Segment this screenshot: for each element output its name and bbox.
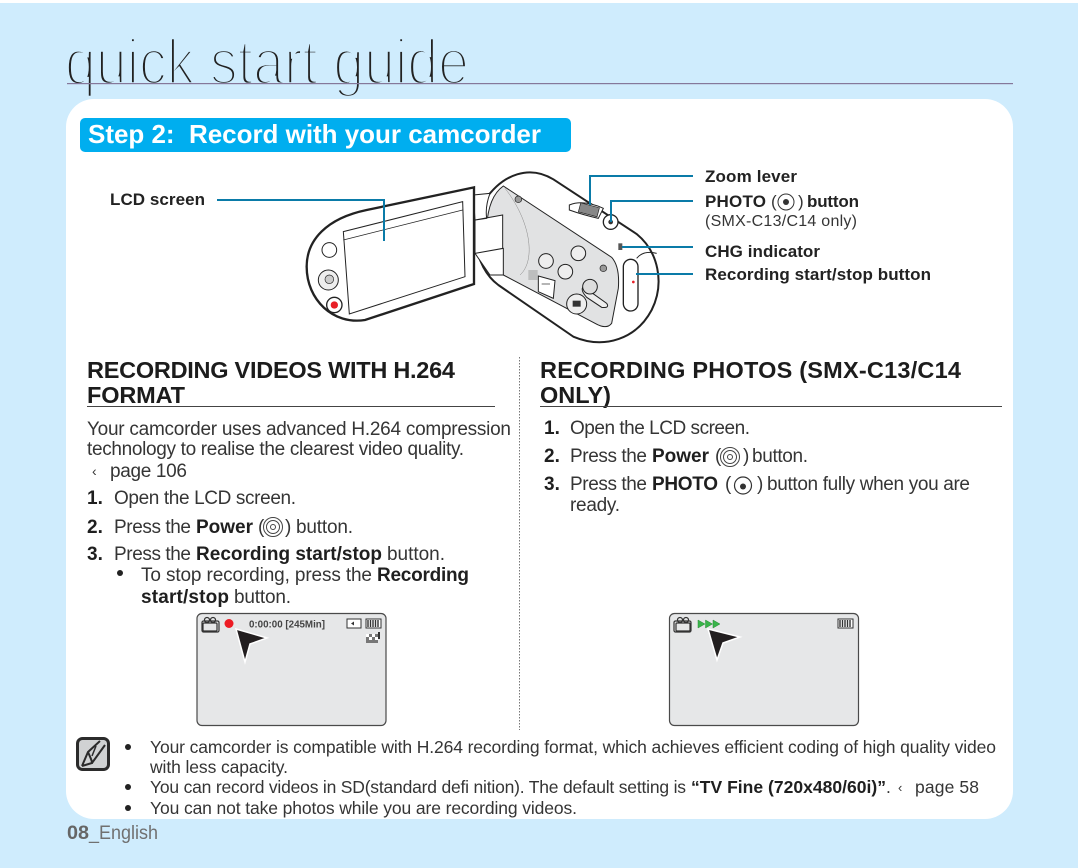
list: video steps: button. [296, 517, 353, 538]
list: video steps: ) [285, 517, 291, 538]
label: photo button: (SMX-C13/C14 only) [705, 213, 857, 230]
label: photo button [705, 192, 859, 230]
text: video intro: page 106 [110, 461, 187, 482]
icon: camera mode [674, 618, 691, 632]
camcorder body [475, 172, 659, 342]
notes list [125, 737, 996, 818]
title: quick start guide [65, 26, 469, 98]
heading: recording photos: ONLY) [540, 382, 611, 408]
list: photo steps: Power [652, 446, 710, 467]
callout lines [217, 176, 693, 274]
notes list: “TV Fine (720x480/60i)” [691, 777, 886, 797]
text: video intro: technology to realise the clearest video quality. [87, 439, 464, 460]
screen: photo mode [670, 614, 858, 726]
icon: power [264, 518, 282, 536]
label: LCD screen: LCD screen [110, 190, 205, 209]
heading: recording photos: RECORDING PHOTOS (SMX-C13/C14 [540, 357, 961, 383]
icon: camera mode [202, 618, 219, 632]
notes list: ‹ [898, 780, 902, 795]
screen: video recording: 0:00:00 [245Min] [249, 620, 325, 630]
notes list: with less capacity. [149, 757, 288, 777]
list: video steps: button. [387, 544, 445, 565]
list: video steps: Press the [114, 544, 191, 565]
list: photo steps: button fully when you are [767, 474, 970, 495]
heading: recording videos [87, 357, 495, 408]
list: photo steps: ) [743, 446, 749, 467]
heading: recording videos: FORMAT [87, 382, 186, 408]
list: video steps: 3. [87, 544, 103, 565]
list: video steps: start/stop [141, 587, 229, 608]
list: photo steps: 3. [544, 474, 560, 495]
notes list: page 58 [915, 777, 979, 797]
notes list: You can record videos in SD(standard defi nition). The default setting is [150, 777, 686, 797]
column divider [518, 357, 520, 730]
list: photo steps: Press the [570, 446, 647, 467]
list: photo steps: ready. [570, 495, 620, 516]
list: video steps: Recording start/stop [196, 544, 382, 565]
label: photo button: ( [771, 192, 777, 211]
heading: step bar: Step 2: Record with your camcorder [88, 119, 541, 149]
arrow [708, 629, 740, 660]
list: video steps: To stop recording, press the [141, 565, 372, 586]
list: photo steps: PHOTO [652, 474, 718, 495]
list: video steps: 1. [87, 488, 103, 509]
icon: power small [720, 448, 740, 466]
list: video steps: Power [196, 517, 254, 538]
list: photo steps: 2. [544, 446, 560, 467]
footer page number: 08 [67, 822, 89, 844]
list: video steps: Recording [377, 565, 469, 586]
hinge [473, 193, 503, 275]
text: video intro: Your camcorder uses advanced H.264 compression [87, 419, 511, 440]
list: photo steps: 1. [544, 418, 560, 439]
list: video steps: ( [258, 517, 265, 538]
text: video intro: ‹ [92, 463, 97, 479]
list: video steps [87, 488, 469, 608]
notes list: Your camcorder is compatible with H.264 recording format, which achieves efficient coding of high quality video [150, 737, 996, 757]
heading: recording videos: RECORDING VIDEOS WITH H.264 [87, 357, 455, 383]
LCD panel [307, 187, 474, 321]
list: video steps: 2. [87, 517, 103, 538]
icon: battery [366, 619, 381, 628]
list: video steps: Open the LCD screen. [114, 488, 296, 509]
list: photo steps: button. [752, 446, 808, 467]
label: zoom lever: Zoom lever [705, 167, 797, 186]
screen: video recording [197, 614, 386, 726]
list: photo steps: ( [715, 446, 722, 467]
icon: note pencil [78, 738, 108, 770]
list: photo steps: ( [725, 474, 732, 495]
label: photo button: button [807, 192, 859, 211]
list: photo steps: Press the [570, 474, 647, 495]
icon: photo [734, 477, 752, 494]
notes list: . [886, 777, 891, 797]
list: photo steps: ) [757, 474, 763, 495]
notes list: You can not take photos while you are recording videos. [150, 798, 577, 818]
footer page number: _English [88, 822, 158, 844]
icon: card [347, 619, 361, 628]
list: photo steps: Open the LCD screen. [570, 418, 750, 439]
icon: quality [366, 632, 380, 643]
label: CHG indicator: CHG indicator [705, 242, 820, 261]
icon: green arrows [698, 620, 720, 628]
panel: main white card [66, 99, 1013, 819]
label: recording button: Recording start/stop button [705, 265, 931, 284]
list: photo steps [544, 418, 970, 516]
list: video steps: button. [234, 587, 291, 608]
list: video steps: Press the [114, 517, 191, 538]
heading: recording photos [540, 357, 1002, 408]
label: photo button: PHOTO [705, 192, 766, 211]
text: video intro [87, 419, 511, 482]
icon: battery [838, 619, 853, 628]
label: photo button: ) [798, 192, 804, 211]
illustration: camcorder [307, 172, 659, 342]
arrow [236, 629, 267, 662]
